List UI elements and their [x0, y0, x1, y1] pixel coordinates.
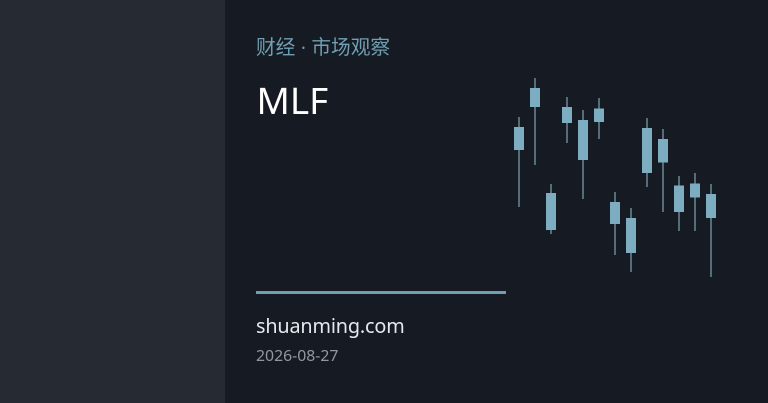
site name: shuanming.com — [256, 312, 405, 339]
category heading: 财经 市场观察 — [256, 33, 390, 60]
date: 2026-08-27 — [256, 344, 338, 366]
divider line — [256, 291, 506, 294]
category heading: · — [301, 36, 306, 60]
panel: left sidebar — [0, 0, 225, 403]
title: MLF — [256, 75, 328, 125]
